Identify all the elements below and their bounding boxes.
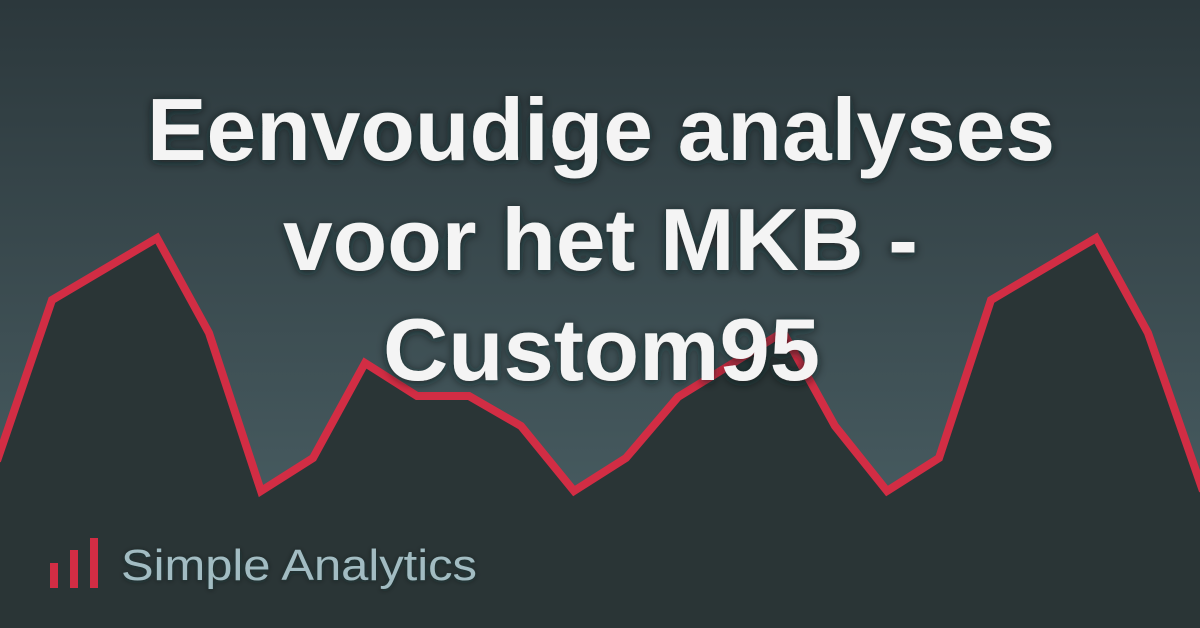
background gradient [0,0,1200,500]
title [147,80,1055,399]
area chart fill [0,238,1200,628]
title: voor het MKB - [283,190,918,289]
title: Eenvoudige analyses [147,80,1055,179]
logo: bar icon [50,538,98,588]
title: Custom95 [383,300,820,399]
line chart stroke [0,238,1200,491]
logo: wordmark: Simple Analytics [121,541,477,590]
